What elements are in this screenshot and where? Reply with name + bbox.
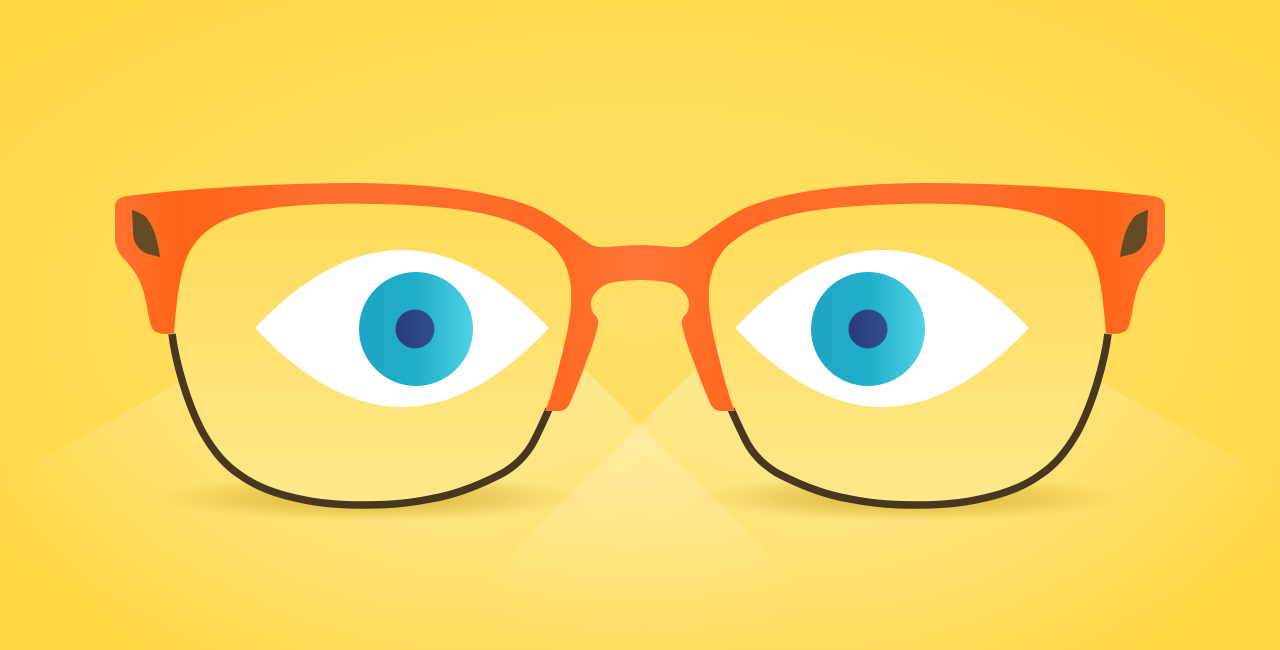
right lens	[709, 200, 1108, 505]
orange frame: left half	[115, 183, 641, 411]
sclera	[735, 250, 1029, 407]
iris	[811, 272, 925, 386]
right eye	[735, 250, 1029, 407]
pupil	[848, 310, 888, 348]
pupil	[396, 310, 434, 348]
shadow: left lens	[152, 474, 588, 522]
iris	[359, 272, 473, 386]
orange frame: right half	[639, 183, 1165, 411]
temple hinge: right	[1120, 210, 1148, 257]
left eye	[255, 250, 549, 407]
light beams	[0, 232, 1280, 650]
sclera	[255, 250, 549, 407]
shadow: right lens	[692, 474, 1128, 522]
temple hinge: left	[132, 210, 160, 257]
lower rim: left	[172, 334, 549, 505]
lower rim: right	[731, 334, 1108, 505]
left lens	[172, 200, 571, 505]
